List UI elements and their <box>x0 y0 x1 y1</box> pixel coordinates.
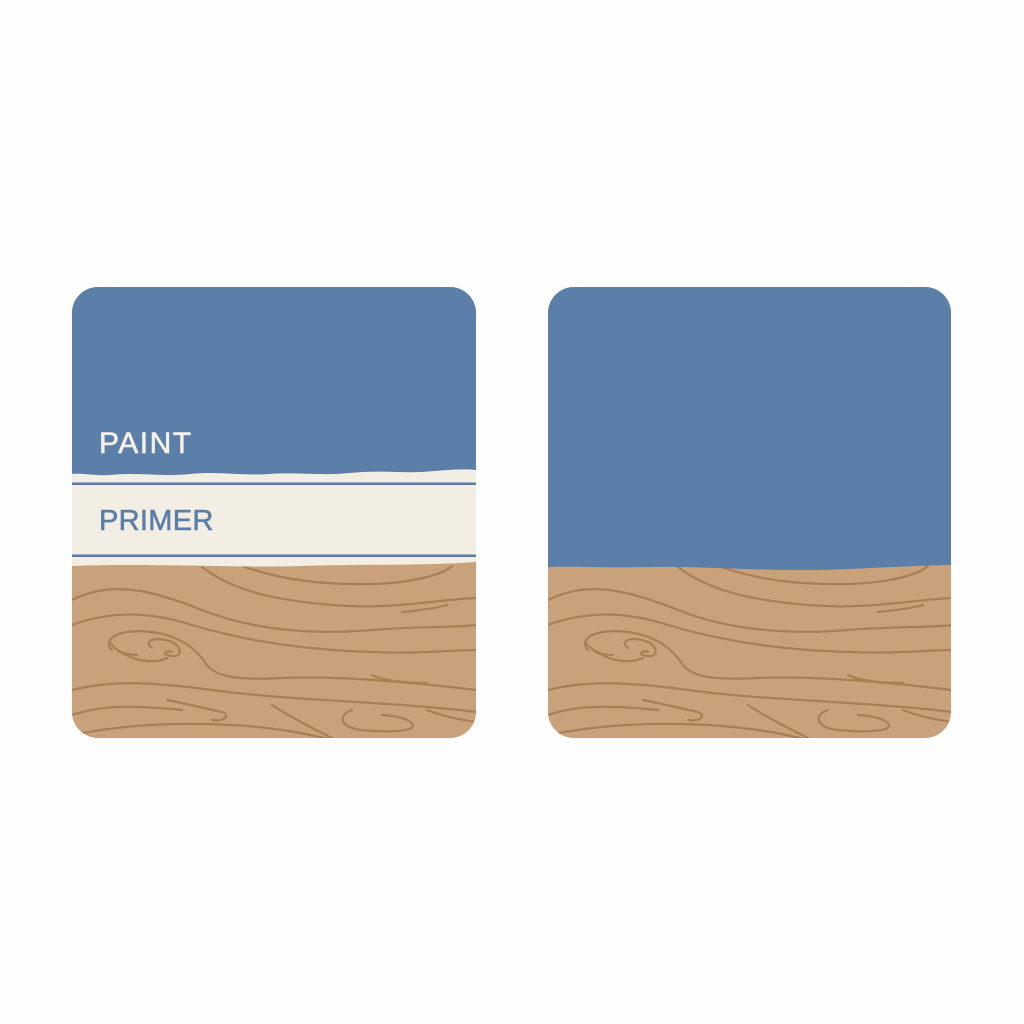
primer layer <box>72 468 476 566</box>
panel: with primer <box>72 287 476 740</box>
label: primer: PRIMER <box>99 505 214 537</box>
label: paint: PAINT <box>99 427 193 460</box>
paint layer <box>72 287 476 475</box>
panel: without primer <box>548 287 952 740</box>
wood grain left <box>72 566 476 740</box>
paint layer right <box>548 287 951 570</box>
primer boundary lines <box>72 482 476 485</box>
wood grain right <box>548 566 952 740</box>
